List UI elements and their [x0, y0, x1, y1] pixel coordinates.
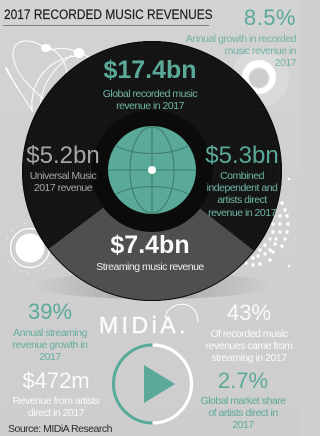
caption: 2017 — [232, 419, 254, 431]
stat: independent — [205, 142, 279, 219]
vinyl record — [22, 41, 282, 301]
grey wedge — [22, 41, 282, 301]
caption: 2017 — [39, 351, 61, 363]
logo arc — [164, 304, 198, 322]
caption: revenue in 2017 — [116, 100, 184, 112]
caption: Annual growth in recorded — [186, 33, 296, 45]
background shading — [52, 276, 252, 299]
value: 43% — [227, 300, 271, 325]
caption: music revenue in — [225, 45, 296, 57]
caption: revenue in 2017 — [208, 207, 276, 219]
source: Source: MIDiA Research — [8, 423, 112, 435]
caption: Global market share — [200, 395, 286, 407]
value: $17.4bn — [103, 56, 197, 84]
caption — [30, 170, 96, 194]
title: 2017 RECORDED MUSIC REVENUES — [4, 7, 213, 23]
caption — [103, 88, 198, 112]
caption: Revenue from artists — [13, 395, 99, 407]
outer edge — [22, 41, 282, 301]
stat: 2.7% — [200, 368, 286, 431]
caption: Streaming music revenue — [96, 261, 204, 273]
caption: Global recorded music — [103, 88, 197, 100]
caption — [13, 327, 88, 363]
caption — [207, 170, 278, 219]
stat: global revenue — [103, 56, 198, 112]
logo: MIDiA: MIDiA. — [99, 312, 189, 338]
value: $5.2bn — [26, 142, 100, 169]
stat: streaming — [96, 231, 204, 273]
stat: $472m — [13, 368, 100, 419]
value: 8.5% — [244, 5, 296, 30]
value: $5.3bn — [205, 142, 279, 169]
caption: Combined — [220, 170, 264, 182]
title underline — [3, 25, 209, 26]
caption — [13, 395, 100, 419]
icon: reel — [242, 60, 288, 106]
icon: play button — [112, 343, 193, 425]
stat: Universal Music — [26, 142, 100, 194]
caption — [206, 328, 292, 364]
value: 39% — [28, 299, 72, 324]
caption: 2017 revenue — [34, 182, 92, 194]
caption: revenues came from — [206, 340, 292, 352]
stat: 39% — [13, 299, 88, 363]
caption: direct in 2017 — [28, 407, 84, 419]
black label ring — [91, 110, 213, 232]
icon: earphones — [4, 40, 89, 112]
stat: 8.5% — [186, 5, 296, 69]
caption: revenue growth in — [13, 339, 87, 351]
stat: 43% — [206, 300, 292, 364]
caption: independent and — [207, 182, 277, 194]
icon: globe — [108, 126, 196, 214]
caption: of artists direct in — [208, 407, 278, 419]
caption: streaming in 2017 — [212, 352, 286, 364]
icon: dots — [245, 178, 290, 268]
caption: Universal Music — [30, 170, 96, 182]
value: $7.4bn — [110, 231, 190, 259]
caption — [200, 395, 286, 431]
value: $472m — [22, 368, 90, 393]
caption: 2017 — [275, 57, 296, 69]
icon: sun ring — [4, 222, 54, 274]
value: 2.7% — [218, 368, 268, 393]
caption — [186, 33, 296, 69]
caption: Of recorded music — [210, 328, 288, 340]
caption: artists direct — [217, 194, 267, 206]
caption: Annual streaming — [13, 327, 87, 339]
